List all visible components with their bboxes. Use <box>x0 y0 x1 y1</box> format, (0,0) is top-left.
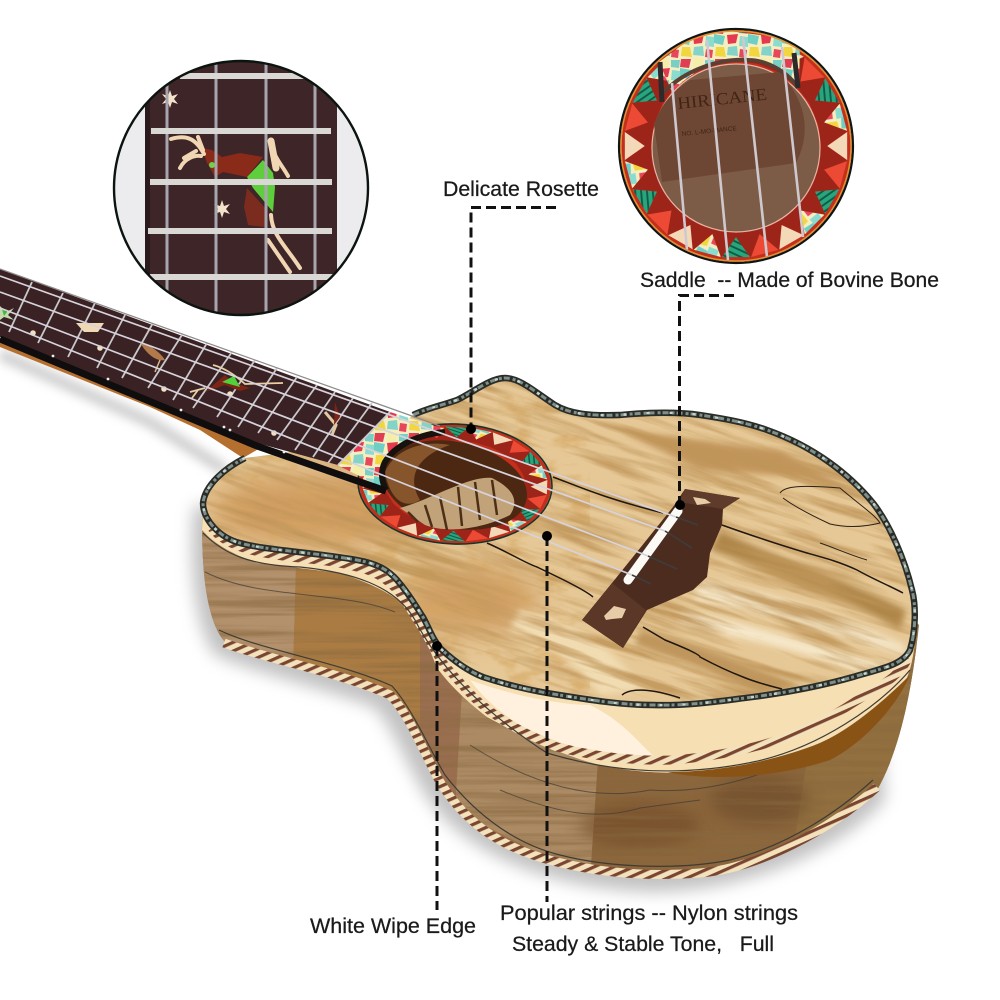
spalted maple top plate <box>206 381 912 702</box>
strings <box>0 276 676 575</box>
frets horizontal <box>148 76 334 277</box>
callout line: Saddle <box>675 296 734 510</box>
rope binding upper <box>212 528 908 760</box>
rope binding lower <box>224 643 877 874</box>
rosette on body <box>356 421 554 547</box>
zoom circle: fretboard inlay <box>114 55 368 325</box>
label: Popular strings: Popular strings -- Nylon strings <box>500 902 798 925</box>
deer inlay <box>171 137 300 272</box>
body sides walnut <box>202 515 919 870</box>
neck shadow <box>0 354 225 470</box>
maple side band <box>202 503 916 773</box>
soundhole <box>375 428 535 542</box>
callout line: strings <box>542 531 552 902</box>
neck top edge <box>0 269 440 426</box>
plate streaks <box>510 430 906 695</box>
strings vertical <box>167 55 315 320</box>
fretboard <box>0 269 445 491</box>
fretboard binding <box>0 339 386 491</box>
spalt lines <box>487 477 903 698</box>
label: Delicate Rosette: Delicate Rosette <box>443 178 599 201</box>
bridge inlays <box>604 497 711 620</box>
hole headblock mosaic <box>659 28 800 92</box>
binding dots <box>52 355 285 453</box>
callout line: white wipe edge <box>432 641 442 910</box>
star inlays <box>30 330 277 436</box>
fretboard mosaic end <box>337 412 445 488</box>
strings <box>672 37 803 260</box>
bridge <box>582 489 740 648</box>
star inlays <box>162 90 230 218</box>
fretboard black edge around hole <box>382 432 445 490</box>
dark curly wedge <box>668 675 910 777</box>
label: Saddle: Saddle -- Made of Bovine Bone <box>640 269 939 292</box>
rosette rim <box>621 31 851 261</box>
neck wood <box>0 338 262 458</box>
drop shadow under body <box>192 505 885 892</box>
neck inlays <box>0 306 340 435</box>
abalone binding <box>203 378 915 705</box>
bridge string ends <box>632 517 698 584</box>
frets <box>9 282 390 465</box>
maple highlight <box>470 680 655 758</box>
hole label: HIRICANE <box>676 85 768 113</box>
zoom circle: rosette <box>619 28 853 263</box>
label: Steady and Stable Tone: Steady & Stable Tone, Full <box>512 933 774 956</box>
hole label: NO. L-MO-MANCE <box>681 125 738 138</box>
thin side lines <box>203 533 910 866</box>
soundhole interior <box>652 64 820 232</box>
hole label <box>654 72 805 182</box>
bridge saddle <box>628 511 678 580</box>
label: White Wipe Edge: White Wipe Edge <box>310 915 476 938</box>
callout line: Delicate Rosette <box>466 208 556 434</box>
